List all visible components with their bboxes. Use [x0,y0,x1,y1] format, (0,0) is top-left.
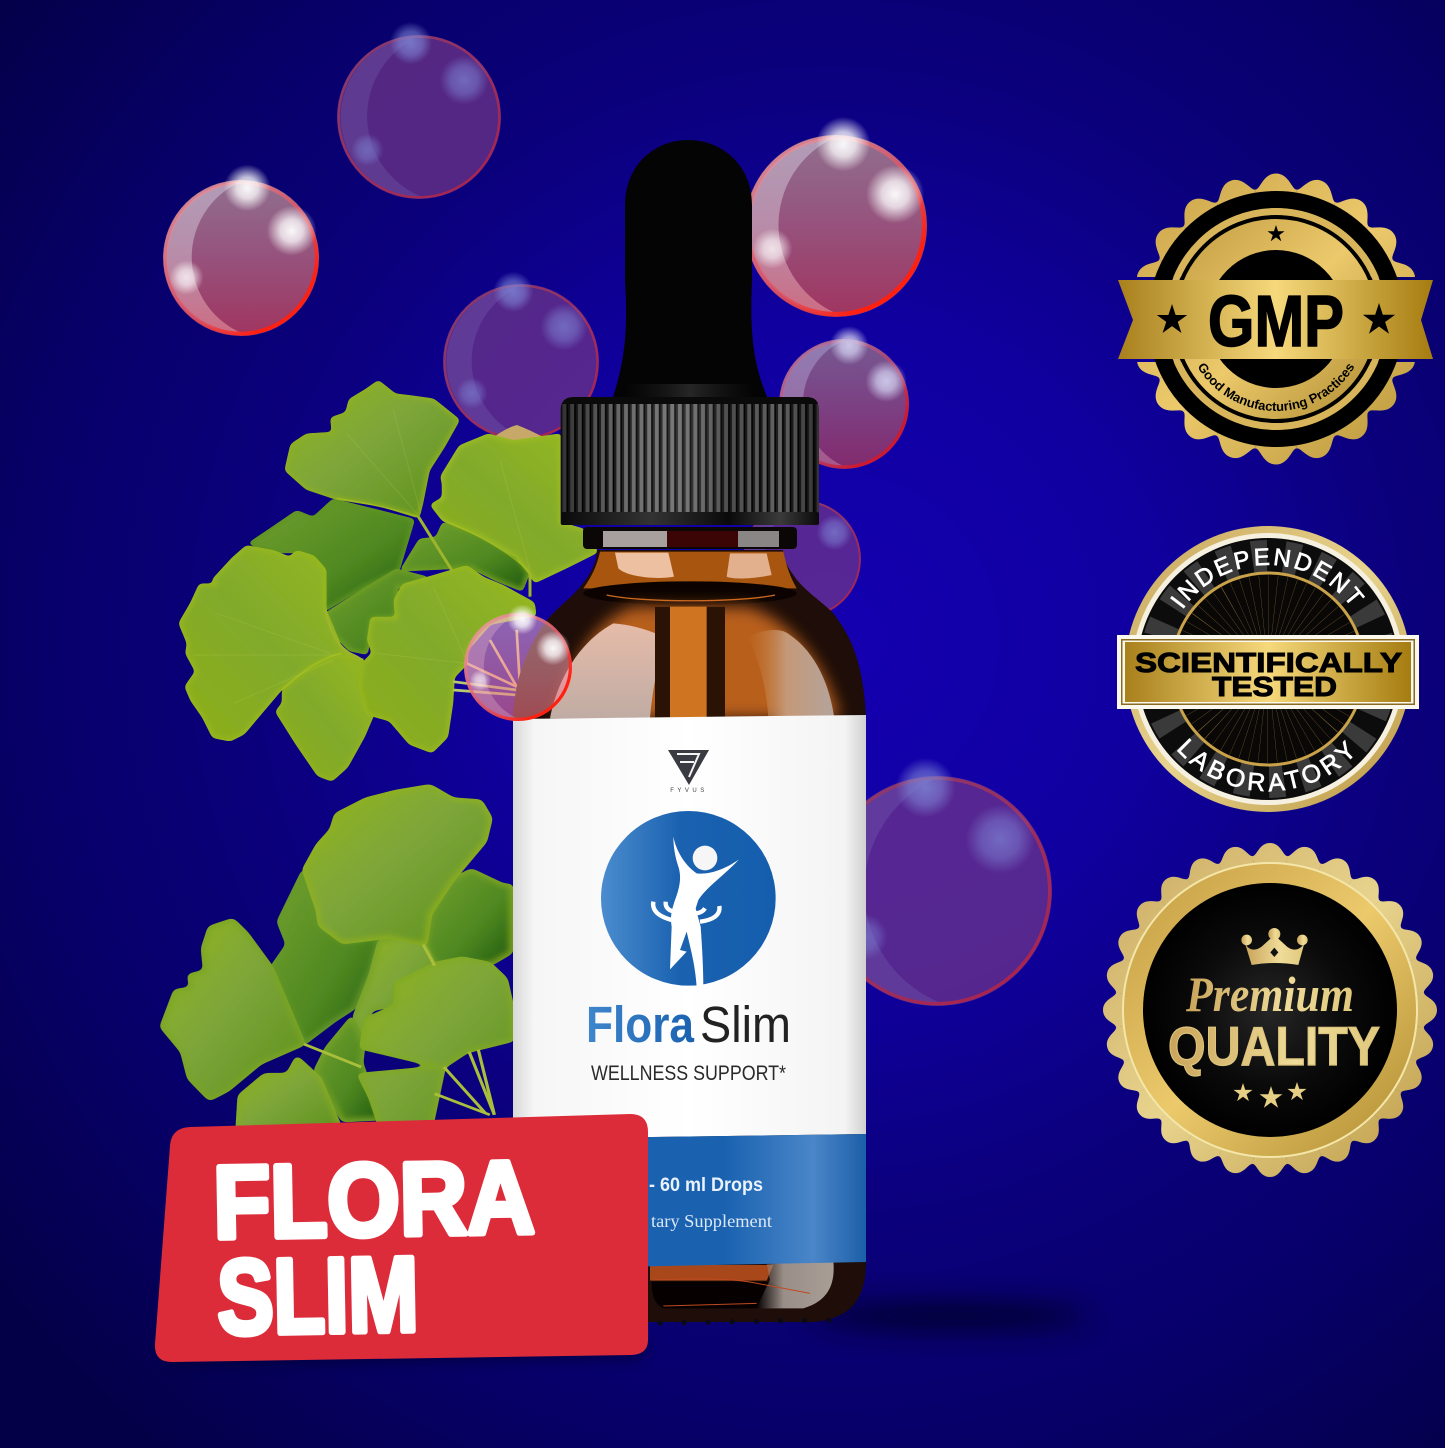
bubble: beside dropper [745,117,927,317]
inner disc [1207,250,1345,388]
leaf: small lower [315,1017,382,1121]
leaf: bottom small [237,1057,343,1134]
collar red centre [667,531,738,547]
leaf: centre [360,567,535,752]
highlight right [747,630,834,718]
bubble: upper left pink [163,164,319,336]
black ring [1156,200,1396,438]
tag subtitle: SLIM [216,1236,419,1357]
highlight left [550,623,667,718]
gold gap ring [1168,212,1384,426]
tag shape [155,1114,648,1362]
leaf: behind centre [327,570,428,653]
banner gold [1121,639,1415,705]
bottle base beads [660,1320,838,1323]
ring segments [1155,556,1381,782]
gold ring [1123,863,1417,1157]
logo circle [601,811,776,987]
supplement text: tary Supplement [651,1211,772,1231]
dropper bulb [613,140,767,397]
ginkgo leaves: upper cluster [180,382,597,780]
banner [1118,280,1433,359]
bubble: behind neck [743,491,861,618]
main amber [557,607,840,718]
thin ring [1174,217,1378,421]
stems and veins [193,410,530,703]
bubble: front of leaf and bottle [464,604,572,721]
figure head [693,846,717,870]
inner circle [1172,573,1364,765]
premium script: Premium [1185,966,1354,1022]
red tag shadow [160,1340,650,1366]
tag title: FLORA [212,1139,535,1260]
glass detail [550,552,840,718]
tagline: WELLNESS SUPPORT* [591,1062,786,1085]
upper amber [583,552,797,588]
neck ring amber line [607,595,775,601]
bubble: right of cap [779,326,909,469]
left star [1157,304,1187,333]
upper highlight left [615,553,674,578]
leaf: front right [359,958,513,1132]
bubble: large lower right [822,758,1052,1006]
arc text top: INDEPENDENT [1170,548,1365,609]
leaf: lower left [277,657,373,780]
bubbles behind the bottle [163,22,1052,1006]
quality text: QUALITY [1168,1015,1380,1077]
leaf: behind centre [354,937,435,1044]
sunburst rays [1218,619,1318,719]
cap rim [561,512,819,525]
brand mark: FYVUS [670,788,708,794]
brand name: Flora [586,996,695,1053]
banner line one: SCIENTIFICALLY [1135,647,1402,678]
brand name: Slim [700,996,791,1053]
right star [1363,303,1395,334]
dropper base sheen [625,384,755,397]
leaf: large left [180,547,363,740]
glass body [513,550,866,1322]
neck collar [583,527,797,549]
leaf: back right [402,523,528,590]
bubble: centre purple [443,272,599,440]
stars [1234,1082,1306,1108]
neck ring dark [583,581,797,605]
dancing figure [670,837,739,987]
crown [1241,928,1308,965]
leaf: right behind [426,870,511,966]
white label [513,715,866,1139]
brand name [586,996,791,1053]
product bottle [513,140,866,1323]
blue band [513,1134,866,1269]
cap shading [561,397,819,513]
brand mark [668,750,709,794]
collar grey left [603,531,667,547]
banner text: GMP [1208,282,1344,362]
top star [1267,225,1285,241]
volume text: - 60 ml Drops [649,1175,763,1196]
white ring [1132,533,1404,805]
collar grey right [738,531,779,547]
leaf: top right [432,435,597,582]
outer gold ring [1125,526,1411,812]
arc text bottom: LABORATORY [1176,738,1353,792]
bottom glass detail [650,1261,834,1308]
bottle shadow [810,1302,1090,1330]
banner white frame [1117,635,1419,709]
cap top edge [562,397,818,404]
banner line two: TESTED [1212,671,1337,702]
leaf: left [161,920,304,1100]
dropper tube [655,607,725,718]
leaf: top [304,786,491,945]
arc text: Good Manufacturing Practices [1199,364,1354,412]
ginkgo leaves: lower cluster [161,786,513,1134]
bubble: top purple [337,22,501,199]
hoop [653,902,719,922]
scalloped seal [1137,174,1415,464]
badge: premium quality [1103,843,1437,1177]
black centre [1143,883,1397,1137]
badge: GMP [1118,174,1433,464]
scalloped seal [1103,843,1437,1177]
badge: scientifically tested [1117,526,1419,812]
ribbed cap [561,397,819,513]
leaf: behind left [272,870,380,1044]
leaf: back dark [250,500,413,610]
dark ring [1137,538,1399,800]
leaf: top [286,382,458,517]
leaf tip seen through bubble [490,425,545,443]
red product tag [155,1114,648,1362]
stems [304,945,494,1115]
upper highlight right [727,553,772,578]
